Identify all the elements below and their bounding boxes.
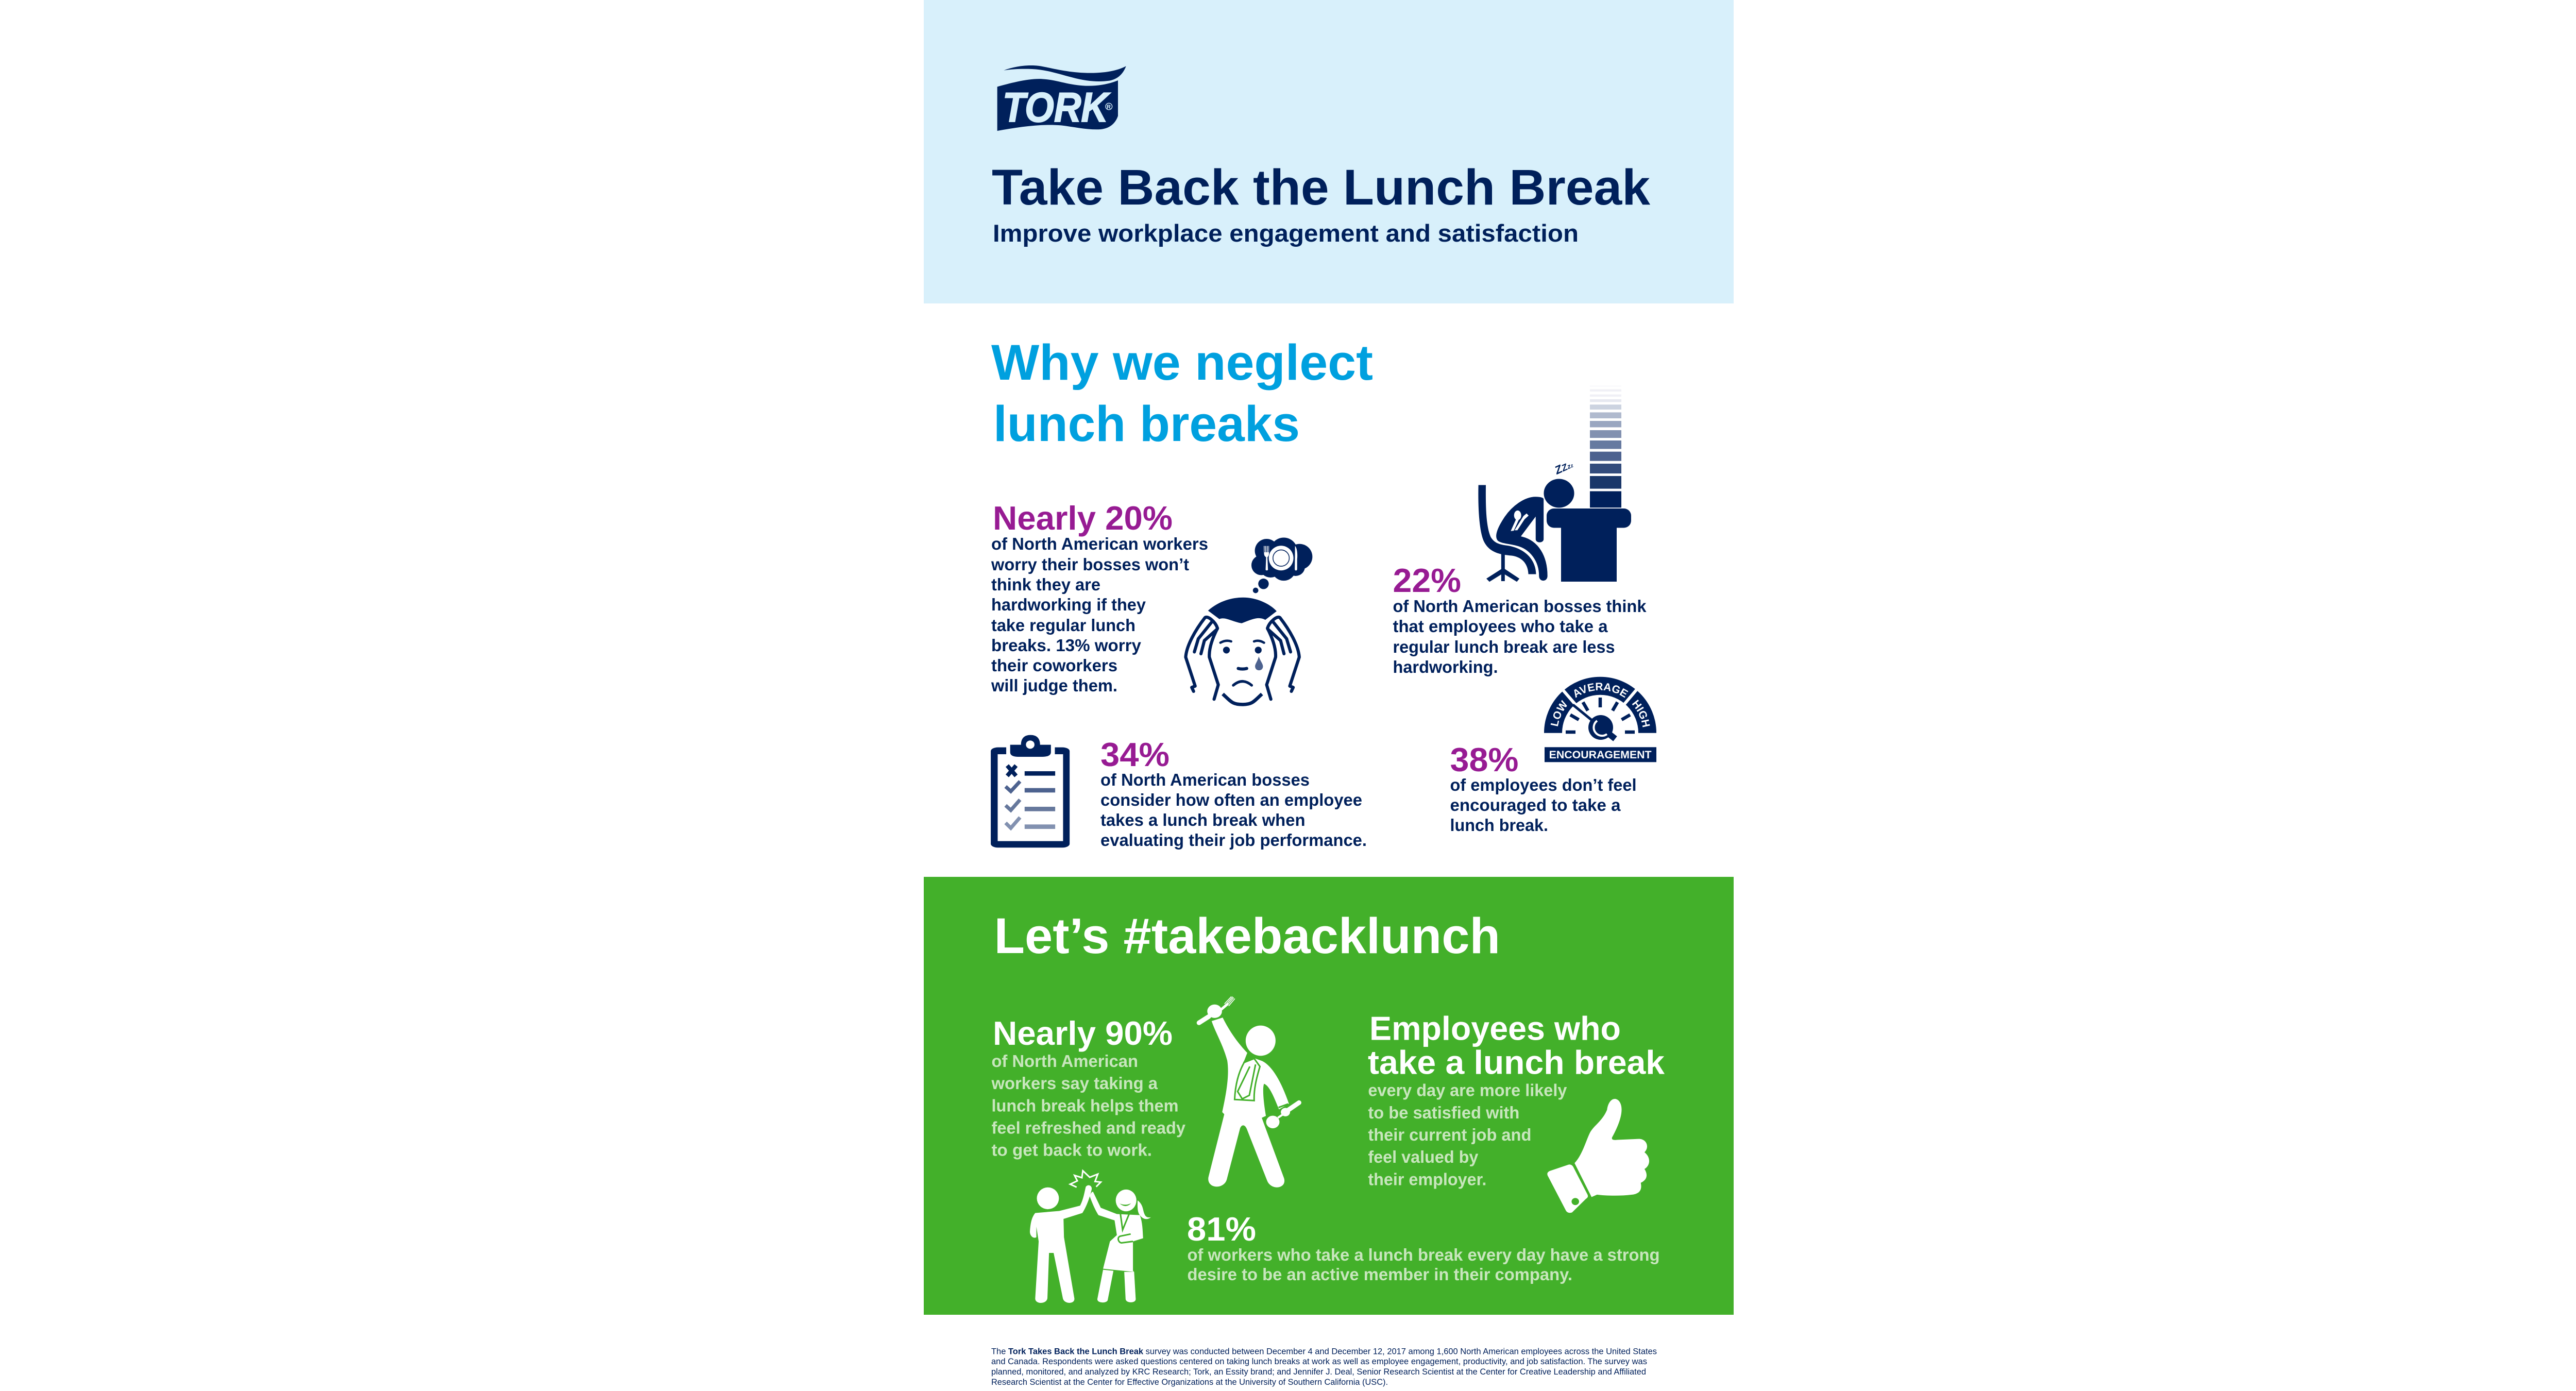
stat block: 34%: takes a lunch break when [1100,810,1306,829]
stat block: 34% [1100,736,1367,850]
footnote: survey methodology: Research Scientist at the Center for Effective Organizations at the University of Southern California (USC). [991,1378,1388,1387]
stat block: nearly 20%: of North American workers [991,534,1208,553]
icon: clipboard checklist [991,735,1070,847]
footnote: survey methodology: The Tork Takes Back the Lunch Break survey was conducted between December 4 and December 12, 2017 among 1,600 North American employees across the United States [991,1347,1657,1356]
logo: Tork flag: TORK [1003,84,1111,131]
stat block: nearly 90%: lunch break helps them [991,1096,1179,1115]
heading: let's takebacklunch: Let’s #takebacklunch [994,908,1500,964]
stat block: employees who take a lunch break: every day are more likely [1368,1081,1567,1099]
icon: encouragement gauge: HIGH [1632,700,1650,727]
stat block: 22%: 22% [1393,562,1461,599]
stat block: employees who take a lunch break: their current job and [1368,1125,1531,1144]
icon: hands and face lines [1185,617,1299,704]
heading: why we neglect lunch breaks [991,334,1373,452]
icon: paper stack [1590,385,1621,507]
icon: encouragement gauge: LOW [1551,700,1567,726]
stat block: employees who take a lunch break: Employees who [1369,1010,1621,1047]
stat block: nearly 20%: will judge them. [991,676,1117,695]
stat block: employees who take a lunch break: feel valued by [1368,1147,1479,1166]
stat block: 22%: hardworking. [1393,657,1498,676]
stat block: 34%: 34% [1100,736,1170,773]
icon: clap spark [1070,1171,1101,1187]
panel: green takebacklunch section [924,877,1734,1315]
icon: thought bubble with plate [1251,537,1312,593]
icon: worried man with thought bubble [1185,537,1312,704]
stat block: nearly 90%: workers say taking a [991,1074,1158,1093]
icon: encouragement gauge: AVERAGE [1574,683,1628,698]
stat block: 22%: regular lunch break are less [1393,637,1615,656]
logo: Tork flag: R [1107,104,1111,110]
stat block: 22% [1393,562,1647,676]
heading: why we neglect lunch breaks: Why we neglect [991,334,1373,391]
stat block: nearly 20%: think they are [991,575,1100,594]
stat block: 22%: of North American bosses think [1393,597,1647,616]
icon: desk [1547,508,1631,582]
stat block: 38% [1450,741,1636,835]
stat block: 34%: evaluating their job performance. [1100,830,1367,850]
stat block: 38%: encouraged to take a [1450,795,1621,815]
footnote: survey methodology [991,1347,1657,1387]
icon: figure on chair [1478,485,1548,582]
stat block: 81%: desire to be an active member in their company. [1187,1265,1572,1284]
stat block: nearly 90%: Nearly 90% [993,1014,1173,1052]
stat block: nearly 90%: feel refreshed and ready [991,1118,1186,1138]
heading: why we neglect lunch breaks: lunch breaks [993,396,1300,452]
icon: head [1544,479,1574,508]
stat block: 34%: consider how often an employee [1100,790,1362,809]
icon: encouragement gauge [1544,677,1656,762]
subtitle: Improve workplace engagement and satisfaction [993,219,1579,247]
stat block: nearly 20% [991,499,1208,695]
stat block: employees who take a lunch break: their employer. [1368,1169,1486,1189]
stat block: employees who take a lunch break: take a lunch break [1368,1044,1665,1081]
stat block: 34%: of North American bosses [1100,770,1310,789]
stat block: nearly 90%: to get back to work. [991,1141,1152,1159]
icon: sleeping worker at desk with paper stack [1478,385,1631,582]
icon: zzz: ZZzz [1552,457,1575,477]
stat block: nearly 20%: worry their bosses won’t [991,555,1189,574]
stat block: 38%: lunch break. [1450,816,1548,835]
logo: Tork flag [997,65,1126,131]
panel: header [924,0,1734,303]
stat block: nearly 20%: their coworkers [991,656,1117,675]
stat block: nearly 20%: Nearly 20% [993,499,1173,537]
icon: two colleagues high-five [1030,1171,1151,1303]
stat block: nearly 20%: hardworking if they [991,595,1146,614]
footnote: survey methodology: planned, monitored, and analyzed by KRC Research; Tork, an Essity brand; and Jennifer J. Deal, Senior Research Scientist at the Center for Creative Leadership and Affiliated [991,1367,1646,1377]
title: Take Back the Lunch Break [992,159,1651,215]
stat block: 38%: 38% [1450,741,1519,778]
stat block: 81% [1187,1210,1660,1284]
stat block: nearly 20%: breaks. 13% worry [991,636,1142,655]
footnote: survey methodology: and Canada. Respondents were asked questions centered on taking lunch breaks at work as well as employee engagement, productivity, and job satisfaction. The survey was [991,1357,1647,1366]
icon: thumbs up [1547,1099,1649,1213]
icon: tear [1255,656,1263,670]
stat block: nearly 20%: take regular lunch [991,616,1136,635]
stat block: 22%: that employees who take a [1393,617,1608,636]
gauge label bar: ENCOURAGEMENT [1549,749,1652,761]
icon: woman [1090,1190,1151,1302]
icon: man [1030,1185,1092,1303]
stat block: 81%: 81% [1187,1210,1256,1248]
stat block: 38%: of employees don’t feel [1450,775,1636,794]
stat block: 81%: of workers who take a lunch break every day have a strong [1187,1245,1660,1264]
stat block: employees who take a lunch break [1368,1010,1665,1189]
icon: hair [1208,598,1277,623]
stat block: nearly 90%: of North American [991,1051,1138,1071]
stat block: employees who take a lunch break: to be satisfied with [1368,1103,1519,1122]
stat block: nearly 90% [991,1014,1186,1159]
icon: cheering man with fork and spoon [1199,996,1299,1188]
